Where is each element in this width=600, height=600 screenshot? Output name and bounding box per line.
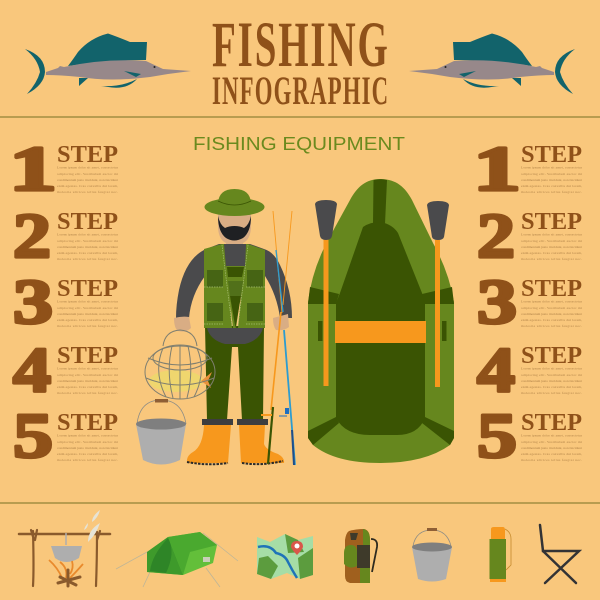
icon: map: [257, 534, 313, 579]
right step 5: 5: [477, 400, 517, 471]
left boot: [187, 425, 231, 463]
heading: fishing equipment: FISHING EQUIPMENT: [193, 134, 405, 154]
right step 1: Lorem ipsum dolor sit amet, consectetur: [521, 166, 583, 170]
right step 4: adipiscing elit. Vestibulum auctor mi: [521, 373, 582, 377]
right step 5: STEP: [521, 410, 582, 436]
left step 4: STEP: [57, 343, 118, 369]
right step 2: 2: [477, 200, 515, 271]
left step 4: [13, 334, 119, 405]
right step 3: enim egestas. Cras convallis dui lorem,: [521, 318, 582, 323]
right step 5: molestie ultrices tellus feugiat nec.: [521, 458, 582, 462]
right step 2: condimentum justo tincidunt, non tincidunt: [521, 245, 582, 250]
left step 5: [13, 400, 119, 471]
icon: folding chair: [540, 525, 579, 583]
left step 5: enim egestas. Cras convallis dui lorem,: [57, 452, 118, 457]
right step 2: Lorem ipsum dolor sit amet, consectetur: [521, 232, 583, 238]
icon: thermos: [490, 527, 511, 582]
icon: bucket: [136, 399, 186, 464]
left step 1: 1: [9, 133, 57, 204]
right step 1: STEP: [521, 142, 582, 168]
right step 4: 4: [477, 334, 515, 405]
boot cuffs: [202, 419, 233, 425]
left step 3: enim egestas. Cras convallis dui lorem,: [57, 318, 118, 323]
right step 4: [477, 334, 583, 405]
left step 3: [13, 266, 119, 337]
left step 3: molestie ultrices tellus feugiat nec.: [57, 324, 118, 328]
left step 1: condimentum justo tincidunt, non tincidunt: [57, 178, 118, 183]
right step 4: molestie ultrices tellus feugiat nec.: [521, 391, 582, 395]
right step 3: 3: [477, 266, 517, 337]
right step 1: condimentum justo tincidunt, non tincidunt: [521, 178, 582, 183]
hands: [174, 317, 191, 332]
right step 3: adipiscing elit. Vestibulum auctor mi: [521, 306, 582, 310]
title: INFOGRAPHIC: [212, 70, 388, 114]
beard: [218, 216, 251, 240]
left step 2: [13, 200, 119, 271]
title: [212, 8, 388, 114]
left step 5: Lorem ipsum dolor sit amet, consectetur: [57, 434, 119, 438]
right step 5: Lorem ipsum dolor sit amet, consectetur: [521, 434, 583, 438]
icon: left sailfish: [25, 34, 191, 94]
left step 4: enim egestas. Cras convallis dui lorem,: [57, 385, 118, 390]
icon: campfire with pot: [19, 510, 110, 586]
right step 1: 1: [473, 133, 521, 204]
right step 5: adipiscing elit. Vestibulum auctor mi: [521, 440, 582, 444]
right step 3: Lorem ipsum dolor sit amet, consectetur: [521, 300, 583, 304]
left step 5: 5: [13, 400, 53, 471]
right step 5: condimentum justo tincidunt, non tincidunt: [521, 446, 582, 451]
right step 4: Lorem ipsum dolor sit amet, consectetur: [521, 366, 583, 372]
left step 5: STEP: [57, 410, 118, 436]
left step 3: adipiscing elit. Vestibulum auctor mi: [57, 306, 118, 310]
icon: backpack: [344, 529, 377, 583]
illustration: inflatable boat: [308, 179, 454, 463]
arms and shirt: [176, 244, 292, 318]
right step 2: molestie ultrices tellus feugiat nec.: [521, 257, 582, 261]
icon: landing net with fish: [145, 330, 215, 399]
head and neck: [218, 212, 251, 250]
right step 3: condimentum justo tincidunt, non tincidunt: [521, 312, 582, 317]
left step 2: molestie ultrices tellus feugiat nec.: [57, 257, 118, 261]
right step 3: STEP: [521, 276, 582, 302]
right step 1: molestie ultrices tellus feugiat nec.: [521, 190, 582, 194]
left step 5: molestie ultrices tellus feugiat nec.: [57, 458, 118, 462]
icon: right sailfish: [409, 34, 575, 94]
left step 2: condimentum justo tincidunt, non tincidunt: [57, 245, 118, 250]
left step 4: condimentum justo tincidunt, non tincidunt: [57, 379, 118, 384]
title: FISHING: [212, 8, 388, 81]
left step 2: STEP: [57, 209, 118, 235]
left step 3: Lorem ipsum dolor sit amet, consectetur: [57, 300, 119, 304]
icon: fishing rods: [261, 211, 295, 465]
left step 1: [9, 133, 119, 204]
right step 2: enim egestas. Cras convallis dui lorem,: [521, 251, 582, 256]
left step 4: 4: [13, 334, 51, 405]
left step 2: adipiscing elit. Vestibulum auctor mi: [57, 239, 118, 243]
right step 3: [477, 266, 583, 337]
right step 2: STEP: [521, 209, 582, 235]
left step 1: enim egestas. Cras convallis dui lorem,: [57, 184, 118, 189]
right step 1: [473, 133, 583, 204]
right step 2: adipiscing elit. Vestibulum auctor mi: [521, 239, 582, 243]
left step 3: STEP: [57, 276, 118, 302]
right step 4: STEP: [521, 343, 582, 369]
belt: [207, 328, 263, 344]
right step 1: adipiscing elit. Vestibulum auctor mi: [521, 172, 582, 176]
right step 4: enim egestas. Cras convallis dui lorem,: [521, 385, 582, 390]
left step 4: adipiscing elit. Vestibulum auctor mi: [57, 373, 118, 377]
right step 4: condimentum justo tincidunt, non tincidunt: [521, 379, 582, 384]
left step 2: 2: [13, 200, 51, 271]
right step 5: enim egestas. Cras convallis dui lorem,: [521, 452, 582, 457]
right step 1: enim egestas. Cras convallis dui lorem,: [521, 184, 582, 189]
left step 4: Lorem ipsum dolor sit amet, consectetur: [57, 366, 119, 372]
vest: [204, 244, 265, 328]
left step 5: adipiscing elit. Vestibulum auctor mi: [57, 440, 118, 444]
left step 4: molestie ultrices tellus feugiat nec.: [57, 391, 118, 395]
right step 3: molestie ultrices tellus feugiat nec.: [521, 324, 582, 328]
left step 3: 3: [13, 266, 53, 337]
left step 2: enim egestas. Cras convallis dui lorem,: [57, 251, 118, 256]
left step 5: condimentum justo tincidunt, non tincidunt: [57, 446, 118, 451]
right step 5: [477, 400, 583, 471]
right step 2: [477, 200, 583, 271]
left step 1: STEP: [57, 142, 118, 168]
trousers: [205, 326, 264, 420]
left step 1: adipiscing elit. Vestibulum auctor mi: [57, 172, 118, 176]
left step 2: Lorem ipsum dolor sit amet, consectetur: [57, 232, 119, 238]
hat: [204, 189, 264, 216]
left step 1: molestie ultrices tellus feugiat nec.: [57, 190, 118, 194]
right boot: [239, 425, 284, 463]
left step 3: condimentum justo tincidunt, non tincidunt: [57, 312, 118, 317]
left step 1: Lorem ipsum dolor sit amet, consectetur: [57, 166, 119, 170]
icon: small bucket: [412, 528, 452, 582]
icon: tent: [116, 532, 238, 587]
illustration: fisherman: [174, 189, 292, 464]
